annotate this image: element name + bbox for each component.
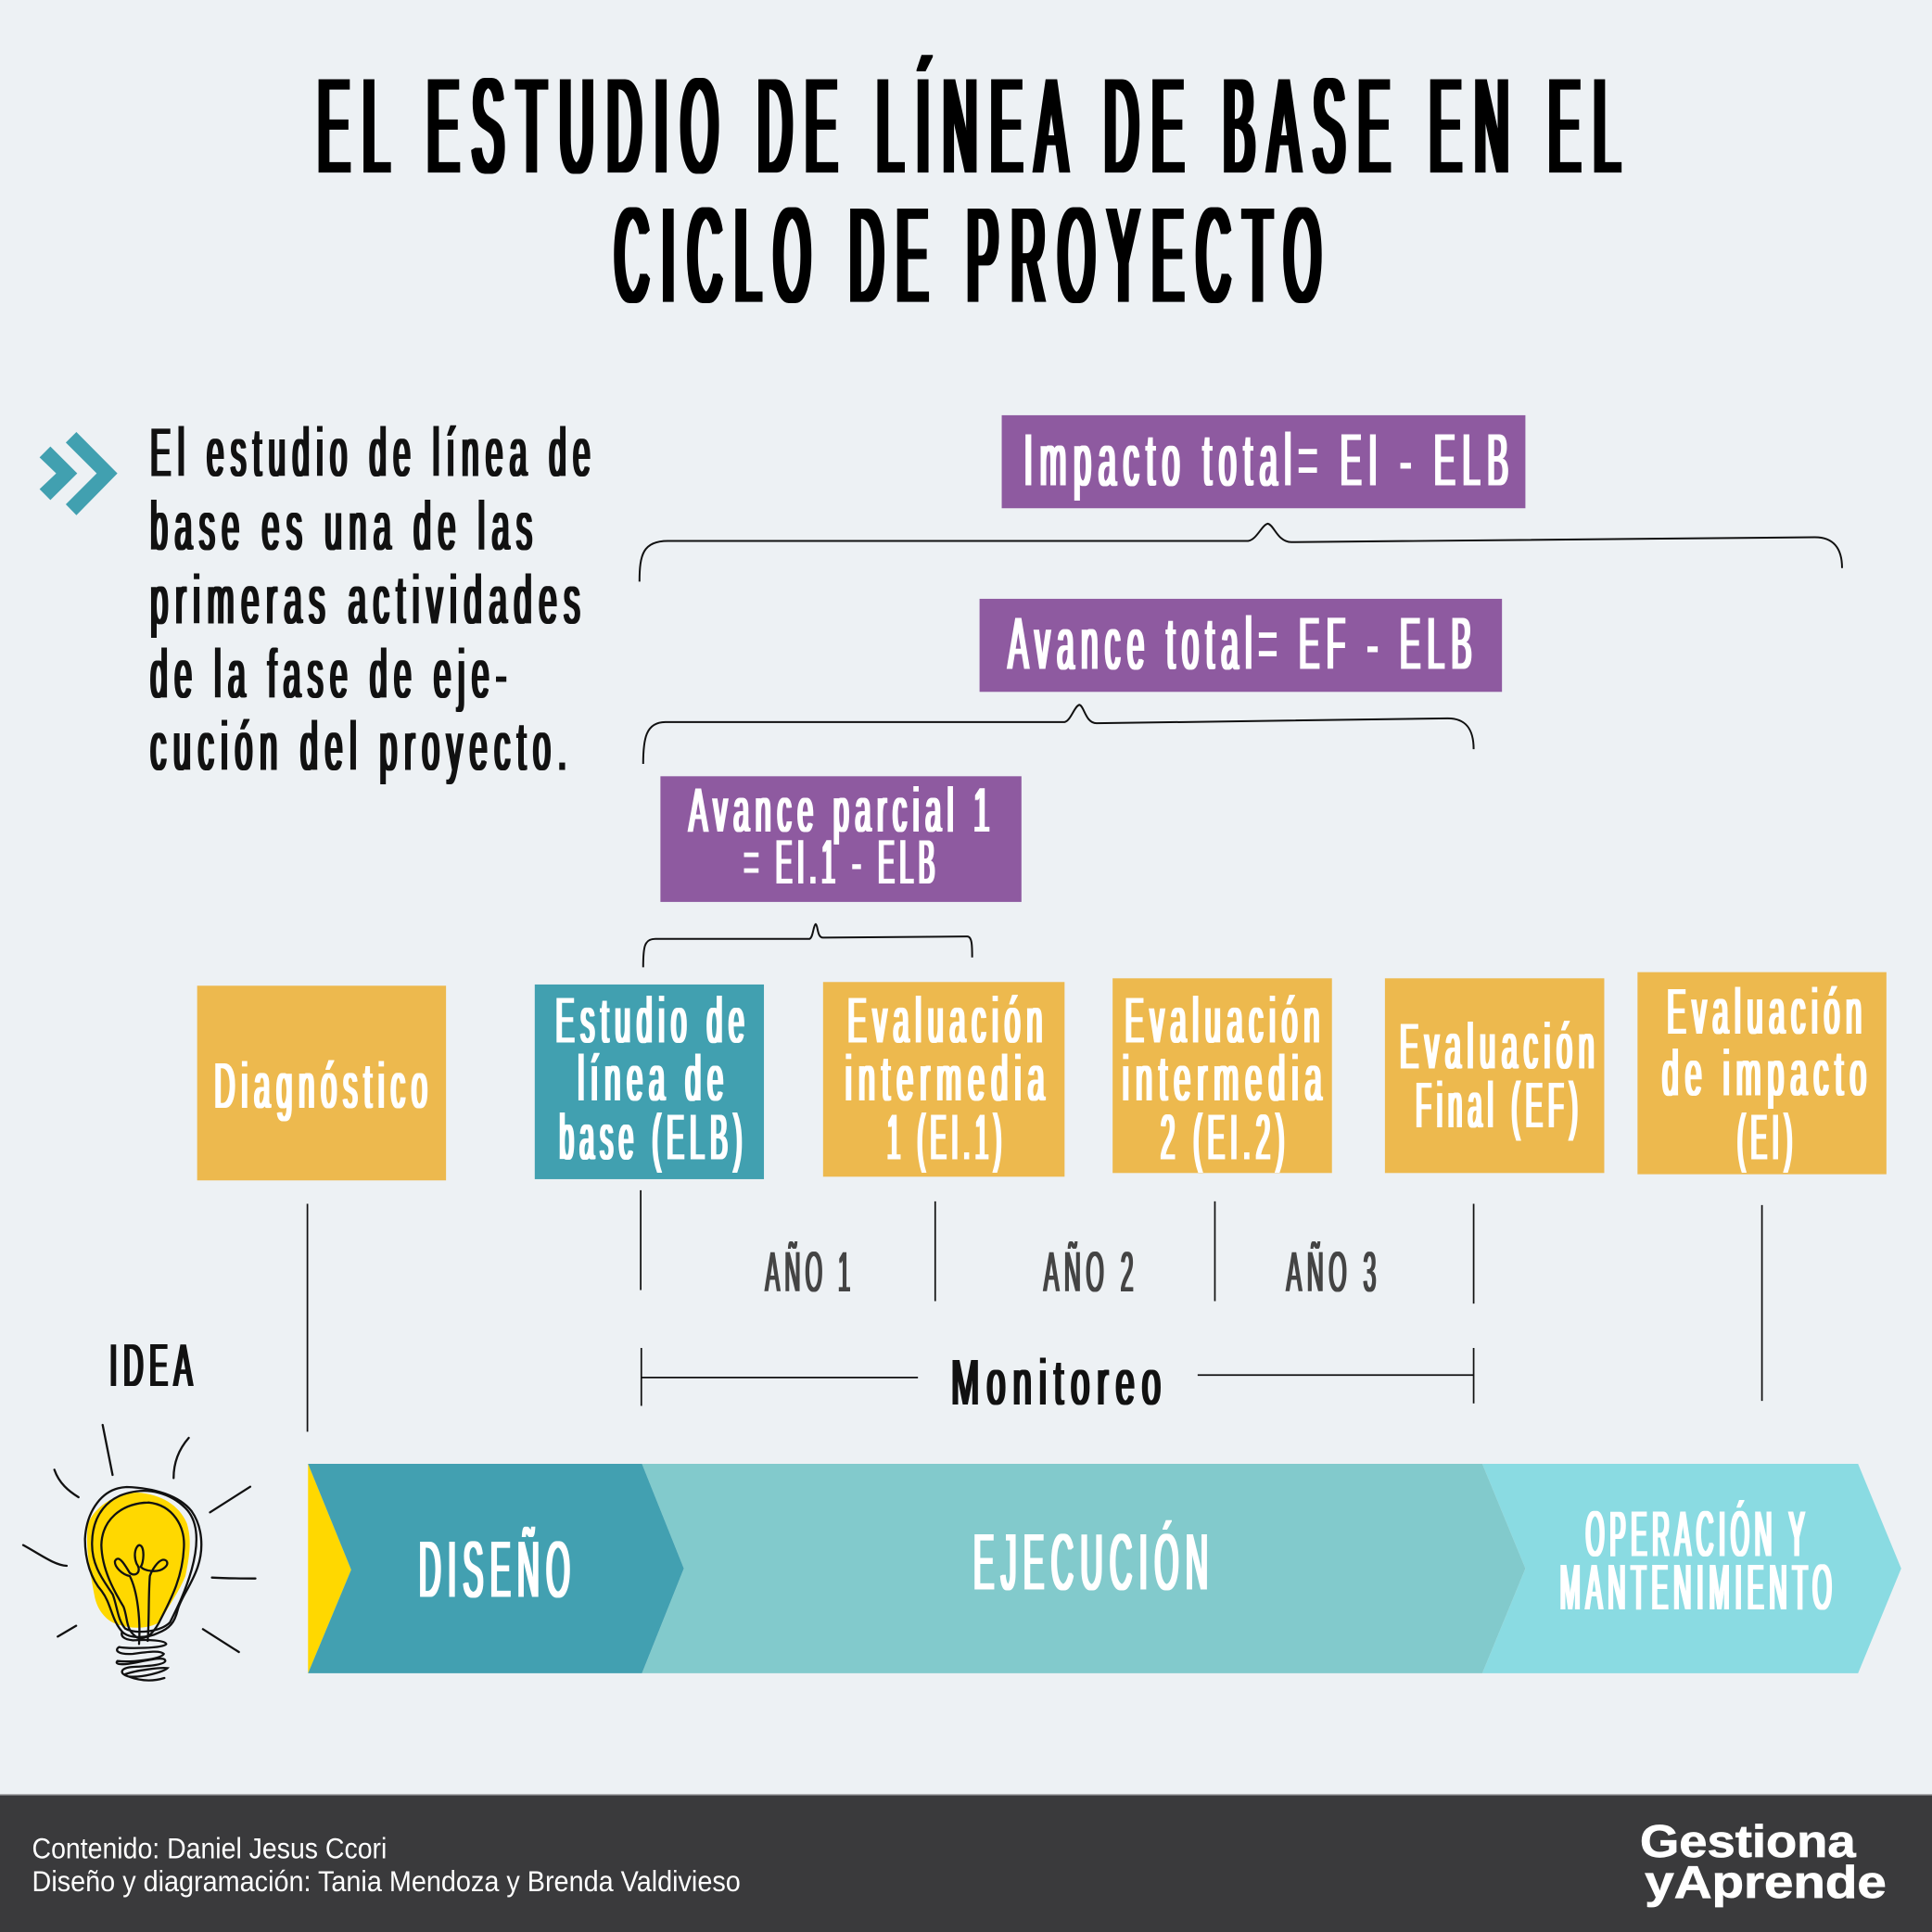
year labels: AÑO 1 (765, 1240, 855, 1303)
text: intermedia (1123, 1042, 1328, 1114)
icon: light bulb (23, 1425, 256, 1681)
bulb glass and filament (85, 1487, 201, 1681)
chevron: diseno (308, 1464, 684, 1673)
box: evaluacion intermedia 2 (1112, 978, 1332, 1174)
text: cución del proyecto. (150, 708, 574, 785)
box: estudio de linea de base (535, 984, 764, 1179)
intro text (150, 414, 597, 785)
box: diagnostico (197, 985, 446, 1180)
text: IDEA (109, 1331, 198, 1399)
footer (0, 1794, 1932, 1932)
chevron: operacion y mantenimiento (1482, 1464, 1901, 1673)
brace: impacto total (640, 524, 1842, 581)
text: Evaluación (847, 984, 1049, 1056)
chevron: ejecucion (642, 1464, 1525, 1673)
text: Evaluación (1400, 1010, 1600, 1082)
box: evaluacion de impacto (1637, 972, 1887, 1175)
chevron: ejecucion: EJECUCIÓN (973, 1519, 1214, 1608)
logo (1640, 1816, 1887, 1908)
text: Avance parcial 1 (689, 776, 996, 845)
text: intermedia (845, 1042, 1051, 1114)
bulb rays (23, 1425, 256, 1652)
box: evaluacion intermedia 2: 2 (EI.2) (1161, 1101, 1290, 1174)
box: impacto total (1002, 415, 1525, 508)
box: avance parcial: = EI.1 - ELB (744, 828, 940, 897)
text: Final (EF) (1416, 1069, 1583, 1141)
text: primeras actividades (150, 562, 587, 639)
icon: double chevron (40, 432, 118, 515)
box: avance parcial (660, 776, 1022, 902)
text: El estudio de línea de (150, 414, 597, 491)
brace: avance total (643, 705, 1474, 764)
text: Estudio de (555, 984, 750, 1056)
box: evaluacion de impacto: (EI) (1737, 1101, 1798, 1174)
intro text: base es una de las (150, 488, 539, 565)
footer credits (32, 1831, 741, 1898)
text: Diagnóstico (214, 1049, 434, 1122)
box: estudio de linea de base: línea de (578, 1042, 730, 1114)
year labels: AÑO 2 (1044, 1240, 1138, 1303)
box: evaluacion intermedia 1: 1 (EI.1) (887, 1101, 1007, 1174)
chevron: idea marker (308, 1464, 351, 1673)
text: base (ELB) (559, 1101, 748, 1174)
year labels (765, 1240, 1381, 1303)
brace: avance parcial (643, 924, 972, 967)
box: evaluacion final (1385, 978, 1604, 1173)
text: AÑO 3 (1287, 1240, 1381, 1303)
title (318, 50, 1633, 331)
footer credits: Diseño y diagramación: Tania Mendoza y Brenda Valdivieso (32, 1864, 741, 1898)
footer credits: Contenido: Daniel Jesus Ccori (32, 1831, 387, 1864)
chevron: diseno: DISEÑO (419, 1525, 577, 1614)
logo: Gestiona (1640, 1816, 1856, 1867)
box: avance total (980, 599, 1502, 692)
logo: yAprende (1645, 1857, 1887, 1908)
monitoreo span: Monitoreo (951, 1346, 1168, 1418)
box: evaluacion intermedia 1 (823, 982, 1064, 1176)
intro text: de la fase de eje- (150, 635, 514, 712)
text: Evaluación (1125, 984, 1326, 1056)
